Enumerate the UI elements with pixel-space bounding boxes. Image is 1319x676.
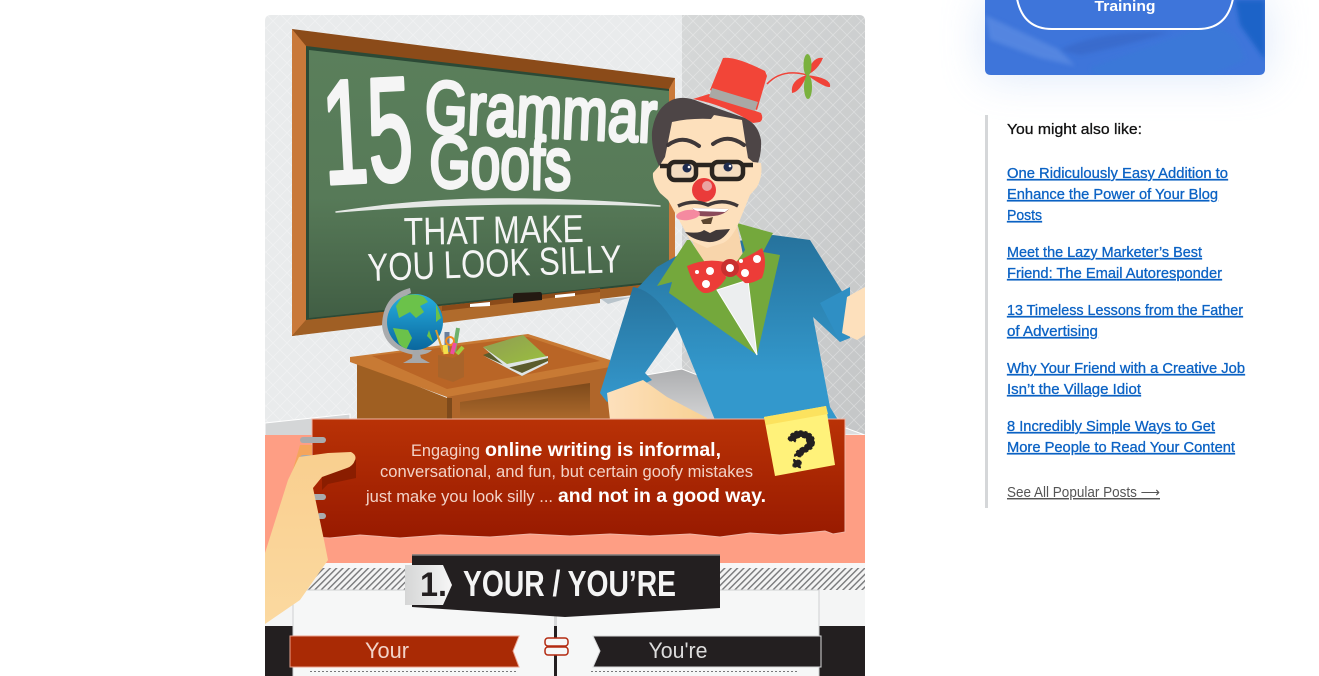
eyes bbox=[682, 162, 732, 172]
related links: Enhance the Power of Your Blog bbox=[1007, 187, 1218, 203]
thumb shadow on banner bbox=[322, 460, 356, 490]
title word Goofs: Goofs bbox=[429, 120, 572, 205]
related links: of Advertising bbox=[1007, 324, 1098, 340]
ribbon label Your: Your bbox=[365, 638, 409, 663]
peach band bbox=[265, 435, 865, 565]
classroom floor bbox=[265, 369, 865, 436]
related links bbox=[1007, 166, 1245, 456]
books bbox=[483, 335, 548, 376]
glasses bbox=[660, 162, 753, 180]
title number 15: 15 bbox=[318, 46, 417, 216]
holding hand bbox=[265, 452, 356, 624]
related links: Isn’t the Village Idiot bbox=[1007, 382, 1141, 398]
globe bbox=[382, 288, 443, 363]
sidebar promo card bbox=[985, 0, 1265, 75]
green lapels bbox=[657, 223, 780, 355]
number tab bbox=[405, 565, 452, 605]
ribbon: You're bbox=[593, 636, 821, 667]
goatee bbox=[685, 229, 730, 242]
related links: Friend: The Email Autoresponder bbox=[1007, 266, 1222, 282]
question mark: ? bbox=[780, 419, 820, 481]
soul patch bbox=[701, 217, 713, 224]
promo button bbox=[1016, 0, 1234, 29]
mouth bbox=[692, 208, 729, 216]
title word Grammar: Grammar bbox=[423, 65, 659, 158]
sidebar related posts bbox=[985, 115, 1245, 508]
chalkboard bbox=[292, 29, 675, 336]
red intro banner bbox=[312, 419, 845, 538]
dashed rules bbox=[310, 670, 798, 672]
bow tie bbox=[687, 248, 765, 293]
intro line two: conversational, and fun, but certain goofy mistakes bbox=[380, 463, 753, 481]
related links: Meet the Lazy Marketer’s Best bbox=[1007, 245, 1202, 261]
chalk underline bbox=[336, 199, 660, 212]
centre spine bbox=[554, 615, 557, 676]
intro line one: online writing is informal, bbox=[485, 440, 721, 461]
intro line three bbox=[365, 486, 766, 507]
teacher's desk bbox=[350, 334, 610, 420]
left hand bbox=[607, 380, 707, 420]
right cuff bbox=[820, 287, 850, 342]
subtitle line two: YOU LOOK SILLY bbox=[367, 238, 622, 290]
moustache bbox=[678, 202, 738, 206]
chalk pieces bbox=[470, 293, 575, 307]
hair bbox=[652, 98, 761, 168]
ribbon: Your bbox=[290, 636, 519, 667]
subtitle line one: THAT MAKE bbox=[403, 208, 584, 254]
intro line one: Engaging bbox=[411, 441, 480, 460]
left sleeve bbox=[600, 287, 677, 402]
head bbox=[653, 115, 762, 248]
sticky note bbox=[764, 406, 835, 481]
related links: 13 Timeless Lessons from the Father bbox=[1007, 303, 1243, 319]
related heading: You might also like: bbox=[1007, 121, 1142, 138]
section title: YOUR / YOU’RE bbox=[463, 563, 676, 604]
related links: More People to Read Your Content bbox=[1007, 440, 1235, 456]
classroom wall bbox=[265, 15, 865, 435]
eyebrows bbox=[668, 139, 744, 146]
section 1 header bbox=[405, 555, 720, 617]
red hat bbox=[693, 58, 767, 123]
see all link: See All Popular Posts ⟶ bbox=[1007, 485, 1160, 501]
pencil cup bbox=[436, 328, 464, 382]
hat feather stem bbox=[767, 73, 807, 84]
icon: paper clip bbox=[545, 638, 568, 655]
clown nose bbox=[692, 178, 716, 202]
paper sheet bbox=[293, 590, 819, 676]
intro line three: and not in a good way. bbox=[558, 486, 766, 507]
related links: 8 Incredibly Simple Ways to Get bbox=[1007, 419, 1215, 435]
eraser bbox=[513, 292, 542, 303]
right hand bbox=[842, 287, 865, 340]
hat flower bbox=[792, 54, 830, 99]
tongue bbox=[676, 210, 700, 220]
teacher character bbox=[600, 54, 865, 420]
panel: infographic bbox=[265, 15, 865, 676]
related links: Why Your Friend with a Creative Job bbox=[1007, 361, 1245, 377]
lower section background bbox=[265, 563, 865, 676]
intro line three: just make you look silly ... bbox=[365, 488, 553, 506]
chalkboard title bbox=[327, 76, 661, 281]
jacket body bbox=[633, 235, 843, 420]
section number: 1. bbox=[420, 566, 447, 604]
related links: One Ridiculously Easy Addition to bbox=[1007, 166, 1228, 182]
ribbon label You're: You're bbox=[648, 638, 708, 663]
neck bbox=[692, 226, 743, 277]
spiral rings bbox=[303, 440, 323, 516]
shirt bbox=[717, 280, 757, 355]
related links: Posts bbox=[1007, 208, 1042, 224]
paper corner behind hand bbox=[290, 445, 312, 480]
